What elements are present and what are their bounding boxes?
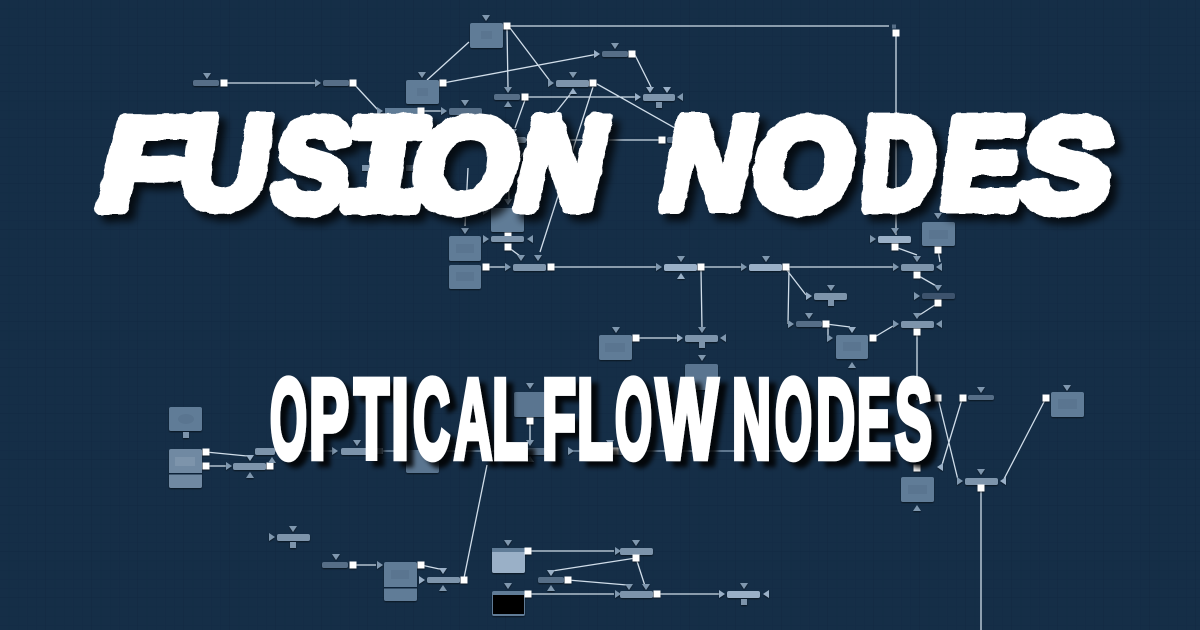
- node cluster: bottom left: [269, 526, 468, 601]
- title: FUSION NODES: O: [744, 93, 865, 238]
- connector lines: [206, 26, 1046, 630]
- subtitle: OPTICAL FLOW NODES: O: [775, 356, 812, 482]
- node graph: [169, 15, 1084, 630]
- title: FUSION NODES: O: [401, 92, 531, 238]
- title: FUSION NODES: N: [504, 90, 621, 236]
- node cluster: centre lower: [599, 327, 726, 390]
- node cluster: loader and merge left: [377, 72, 482, 122]
- node cluster: middle bars under title: [362, 129, 693, 171]
- subtitle: OPTICAL FLOW NODES: O: [615, 356, 652, 482]
- subtitle: OPTICAL FLOW NODES: T: [354, 356, 389, 482]
- title: FUSION NODES: E: [934, 90, 1031, 236]
- node cluster: bottom right: [901, 385, 1084, 511]
- subtitle: OPTICAL FLOW NODES: L: [577, 356, 613, 482]
- node cluster: title-hidden centre node: [514, 383, 625, 462]
- title: FUSION NODES: I: [329, 97, 441, 251]
- subtitle: OPTICAL FLOW NODES: F: [542, 356, 576, 482]
- text: S: [895, 356, 932, 482]
- node cluster: top right router: [892, 24, 900, 36]
- title: FUSION NODES: [85, 90, 1123, 251]
- subtitle: OPTICAL FLOW NODES: W: [656, 356, 718, 482]
- subtitle: OPTICAL FLOW NODES: C: [413, 356, 450, 482]
- subtitle: OPTICAL FLOW NODES: D: [816, 356, 855, 482]
- title: FUSION NODES: F: [85, 92, 207, 237]
- node cluster: right stack: [870, 213, 955, 336]
- subtitle: OPTICAL FLOW NODES: I: [391, 356, 409, 482]
- title: FUSION NODES: S: [1012, 93, 1123, 238]
- subtitle: OPTICAL FLOW NODES: [270, 356, 932, 482]
- subtitle: OPTICAL FLOW NODES: N: [732, 356, 771, 482]
- node cluster: upper left chain: [193, 73, 356, 87]
- node cluster: upper middle bars: [494, 43, 683, 108]
- subtitle: OPTICAL FLOW NODES: O: [270, 356, 307, 482]
- title: FUSION NODES: N: [649, 90, 768, 236]
- subtitle: OPTICAL FLOW NODES: A: [454, 356, 492, 482]
- title: FUSION NODES: S: [264, 93, 361, 238]
- subtitle: OPTICAL FLOW NODES: E: [857, 356, 891, 482]
- title: FUSION NODES: U: [172, 90, 281, 235]
- node cluster: left loaders: [169, 407, 439, 488]
- node cluster: branch nodes: [788, 285, 876, 368]
- node cluster: main row: [505, 255, 942, 279]
- subtitle: OPTICAL FLOW NODES: L: [492, 356, 528, 482]
- subtitle: OPTICAL FLOW NODES: P: [309, 356, 349, 482]
- node cluster: bottom centre: [492, 540, 769, 616]
- node cluster: top loader: [470, 15, 510, 48]
- title: FUSION NODES: D: [857, 90, 941, 236]
- node cluster: central loaders: [449, 199, 533, 289]
